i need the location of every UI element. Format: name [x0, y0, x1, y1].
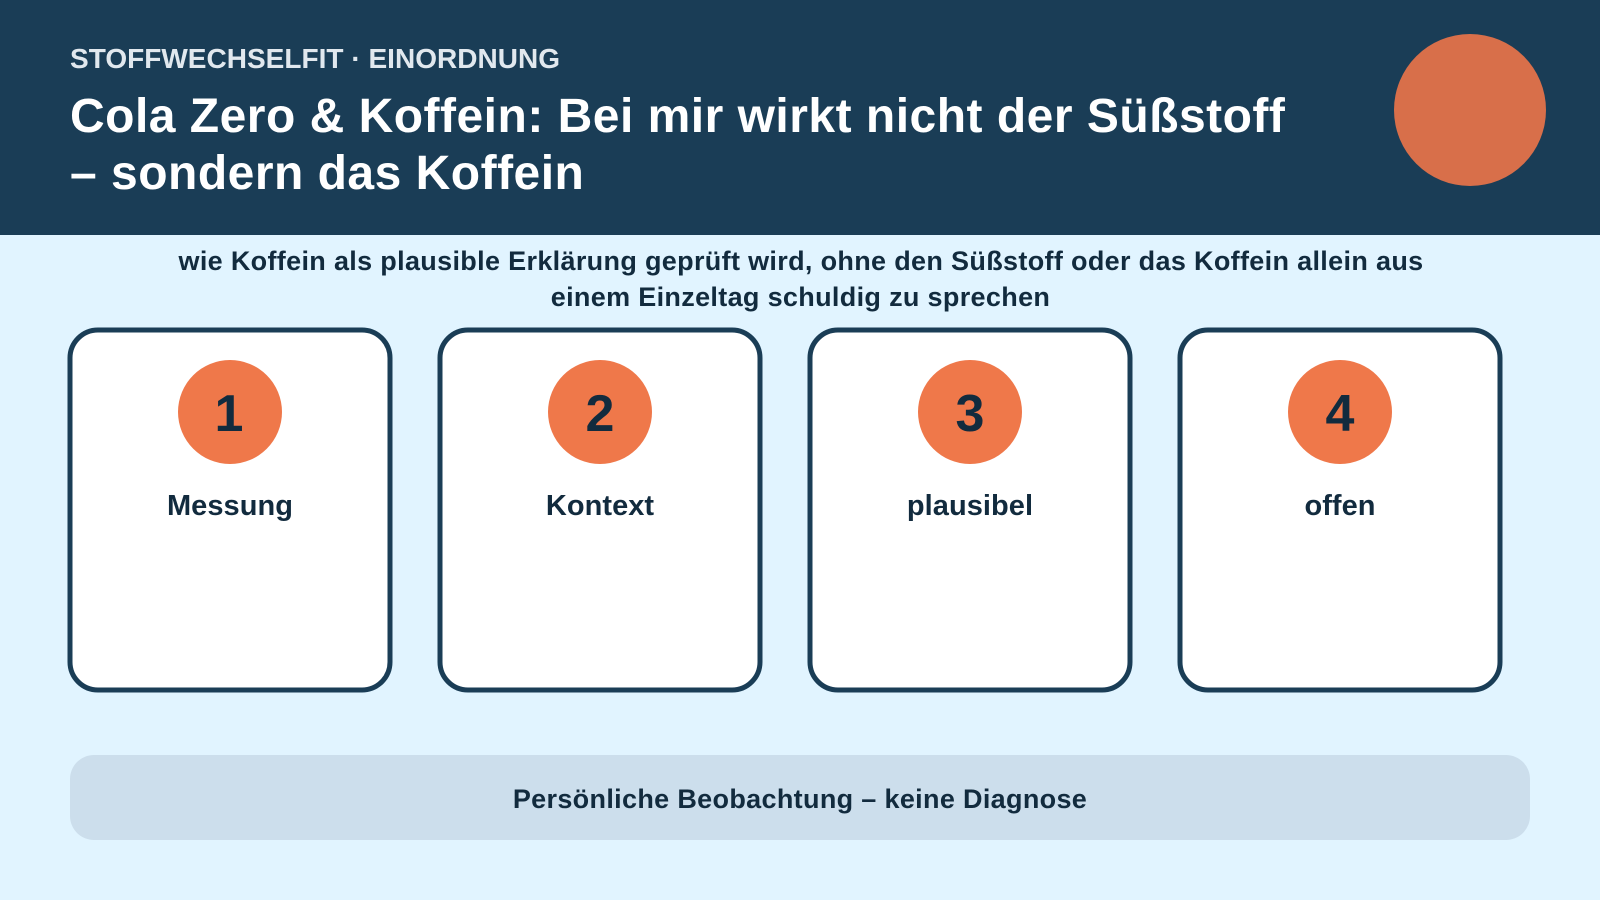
card 4: offen: [1180, 330, 1500, 690]
number badge 1: 1: [215, 385, 243, 443]
card label 1: Messung: [167, 490, 293, 522]
card label 4: offen: [1304, 490, 1376, 522]
card 1: Messung: [70, 330, 390, 690]
number badge 2: 2: [586, 385, 614, 443]
title: Cola Zero & Koffein: Bei mir wirkt nicht der Süßstoff: [70, 90, 1286, 143]
card label 3: plausibel: [907, 490, 1033, 522]
eyebrow label: STOFFWECHSELFIT · EINORDNUNG: [70, 43, 560, 74]
subtitle: einem Einzeltag schuldig zu sprechen: [551, 282, 1050, 312]
header band: [0, 0, 1600, 235]
number badge 3: 3: [956, 385, 984, 443]
footer note: Persönliche Beobachtung – keine Diagnose: [513, 784, 1087, 814]
subtitle: [177, 246, 1424, 312]
number badge 2: [548, 360, 652, 464]
card label 2: Kontext: [546, 490, 654, 522]
number badge 4: [1288, 360, 1392, 464]
footer note: [70, 755, 1530, 840]
header decorative circle: [1394, 34, 1546, 186]
card 2: Kontext: [440, 330, 760, 690]
title: – sondern das Koffein: [70, 147, 584, 200]
number badge 3: [918, 360, 1022, 464]
subtitle: wie Koffein als plausible Erklärung geprüft wird, ohne den Süßstoff oder das Koffein allein aus: [177, 246, 1424, 276]
card 3: plausibel: [810, 330, 1130, 690]
title: [70, 90, 1286, 200]
number badge 1: [178, 360, 282, 464]
number badge 4: 4: [1326, 385, 1355, 443]
